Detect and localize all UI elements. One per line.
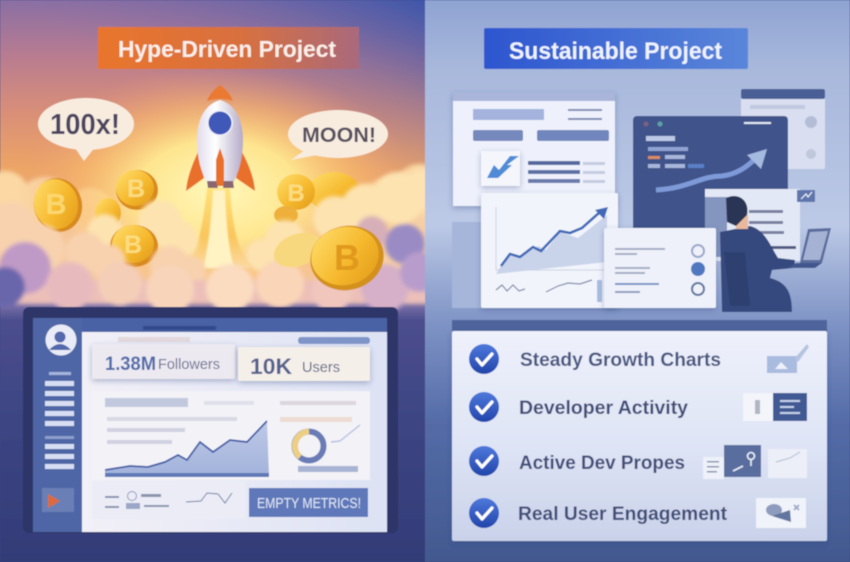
icon: rocket <box>186 85 255 191</box>
coins left group <box>28 170 158 237</box>
row: Real User Engagement: Real User Engagement <box>518 504 728 525</box>
stat card: followers: Followers <box>158 357 220 373</box>
badge: empty metrics <box>249 488 368 517</box>
stat card: users <box>238 347 370 381</box>
coin: large right: B <box>334 237 360 278</box>
front clouds <box>0 202 440 314</box>
window: checks card <box>604 228 716 308</box>
heading plate: Sustainable Project <box>484 28 748 69</box>
coin: B <box>287 180 305 207</box>
heading plate: Hype-Driven Project <box>98 27 359 69</box>
badge: empty metrics: EMPTY METRICS! <box>257 496 361 512</box>
icon: chart tile <box>481 151 520 186</box>
coin: lower left: B <box>124 231 142 259</box>
stat card: followers: 1.38M <box>105 354 156 375</box>
window: rising chart <box>481 193 618 308</box>
heading plate: Sustainable Project: Sustainable Project <box>509 38 722 65</box>
stat card: users: 10K <box>250 354 292 379</box>
icon: code tiles <box>743 393 807 421</box>
row: Steady Growth Charts: Steady Growth Charts <box>520 350 721 371</box>
mid clouds <box>87 170 442 271</box>
back clouds <box>0 164 446 295</box>
sidebar <box>33 318 83 532</box>
row: Developer Activity: Developer Activity <box>519 398 688 419</box>
heading plate: Hype-Driven Project: Hype-Driven Project <box>118 36 336 62</box>
row: Developer Activity <box>469 392 807 422</box>
panel: hype-driven project <box>0 0 446 562</box>
icon: image tile <box>767 344 809 373</box>
window: checklist <box>452 320 827 541</box>
coin <box>95 198 121 228</box>
dashboard monitor <box>23 307 398 533</box>
row: Steady Growth Charts <box>469 344 809 374</box>
speech bubble: 100x! <box>38 98 134 161</box>
window: detail behind analyst <box>705 189 815 261</box>
line chart: steady growth <box>501 207 608 266</box>
speech bubble: 100x!: 100x! <box>50 109 120 141</box>
row: Active Dev Propes: Active Dev Propes <box>519 453 685 474</box>
coin: lower left <box>110 225 158 267</box>
background: sunset sky <box>0 0 425 562</box>
coin: large right <box>269 218 391 298</box>
faint window behind chart <box>452 222 484 308</box>
window: dark growth chart <box>633 116 788 236</box>
icon: avatar <box>46 324 76 356</box>
window: status card <box>741 89 825 169</box>
icon: play tile <box>42 488 74 512</box>
icon: route tiles <box>703 445 807 479</box>
window: project overview <box>453 92 615 206</box>
mini metrics row <box>92 481 245 519</box>
icon: chat tile <box>756 498 806 528</box>
coin: B <box>127 175 145 203</box>
coin: B <box>46 189 66 221</box>
speech bubble: MOON! <box>288 110 388 160</box>
line chart: followers <box>105 421 269 477</box>
coin <box>274 206 298 224</box>
glow behind rocket <box>18 65 418 315</box>
row: Real User Engagement <box>469 498 806 528</box>
rocket flame <box>186 188 250 268</box>
icon: laptop <box>788 228 831 268</box>
stat card: users: Users <box>302 359 340 376</box>
donut chart <box>294 432 324 460</box>
coin <box>308 172 360 212</box>
background <box>425 0 850 562</box>
row: Active Dev Propes <box>469 445 807 479</box>
chart panel <box>92 391 370 480</box>
figure: analyst at desk <box>720 196 831 312</box>
speech bubble: MOON!: MOON! <box>302 124 376 147</box>
stat card: followers <box>92 344 235 379</box>
panel: sustainable project <box>425 0 850 562</box>
arrow: growth trend <box>656 157 757 190</box>
coins right group <box>274 172 360 224</box>
